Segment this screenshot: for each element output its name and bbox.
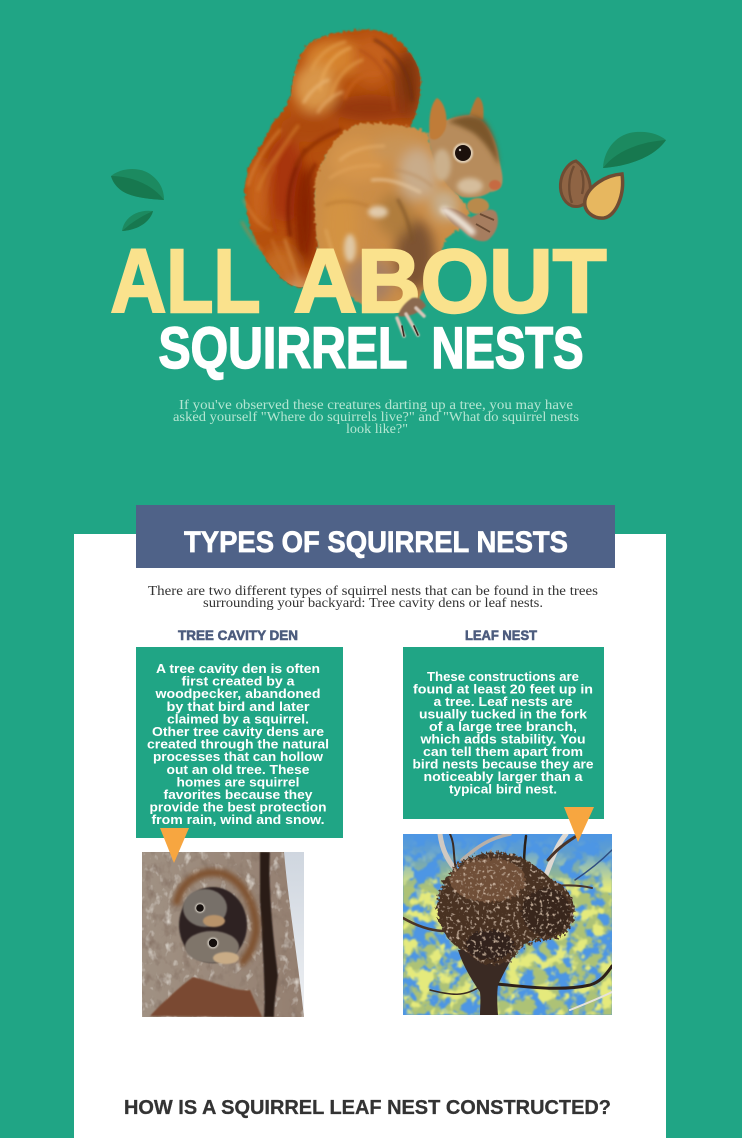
panel: leaf nest text box: These constructions are (427, 669, 579, 684)
section intro text: surrounding your backyard: Tree cavity dens or leaf nests. (203, 595, 543, 610)
panel: leaf nest text box: of a large tree branch, (429, 719, 577, 734)
panel: tree cavity den text box: homes are squirrel (176, 774, 300, 789)
squirrel eye (453, 143, 473, 163)
panel: tree cavity den text box (136, 647, 343, 838)
squirrel body (315, 123, 470, 310)
subheading: tree cavity den: TREE CAVITY DEN (178, 627, 298, 643)
panel: tree cavity den text box: A tree cavity den is often (156, 661, 320, 676)
illustration: squirrel (242, 30, 503, 310)
section intro text: There are two different types of squirrel nests that can be found in the trees (148, 583, 598, 598)
title line: ALL ABOUT: ALL (110, 232, 260, 332)
panel: leaf nest text box: bird nests because they are (412, 756, 594, 771)
panel: tree cavity den text box: out an old tree. These (166, 762, 310, 777)
icon: left large leaf (111, 169, 164, 200)
panel: tree cavity den text box: claimed by a squirrel. (167, 711, 309, 726)
icon: tan nut (585, 174, 623, 218)
squirrel hind foot (397, 298, 426, 336)
panel: leaf nest text box: typical bird nest. (449, 781, 557, 796)
icon: brown nut (560, 161, 590, 206)
title line: ALL ABOUT (110, 232, 607, 332)
squirrel far ear (469, 97, 483, 120)
panel: leaf nest text box: a tree. Leaf nests are (434, 694, 572, 709)
arrow: leaf nest pointer (564, 807, 594, 842)
panel: tree cavity den text box: Other tree cavity dens are (152, 724, 324, 739)
cavity squirrel upper (183, 889, 227, 927)
photo: squirrels in tree cavity (142, 852, 304, 1017)
intro text: look like?" (346, 421, 408, 436)
panel: white content (74, 534, 666, 1138)
panel: tree cavity den text box: by that bird and later (166, 699, 310, 714)
panel: leaf nest text box: found at least 20 feet up in (413, 682, 593, 696)
squirrel nose (489, 180, 501, 190)
icon: right leaf (603, 132, 666, 168)
panel: tree cavity den text box: created through the natural (147, 737, 329, 752)
section banner (136, 505, 615, 568)
panel: tree cavity den text box: processes that can hollow (153, 749, 324, 764)
cavity squirrel lower (185, 931, 239, 964)
panel: tree cavity den text box: provide the best protection (150, 800, 327, 815)
squirrel paws and nut (442, 198, 498, 241)
subheading: leaf nest: LEAF NEST (465, 627, 537, 643)
section intro text (148, 583, 598, 610)
panel: leaf nest text box (403, 647, 604, 819)
panel: leaf nest text box: usually tucked in the fork (419, 706, 588, 721)
section heading: TYPES OF SQUIRREL NESTS (184, 526, 568, 559)
intro text: asked yourself "Where do squirrels live?" and "What do squirrel nests (173, 409, 579, 424)
panel: leaf nest text box: which adds stability. You (419, 731, 586, 746)
page artwork (74, 28, 666, 1138)
nest (437, 852, 574, 965)
squirrel head (428, 115, 503, 197)
title line: SQUIRREL NESTS: SQUIRREL (158, 316, 408, 381)
squirrel near ear (429, 98, 447, 140)
intro text: If you've observed these creatures darting up a tree, you may have (179, 397, 573, 412)
squirrel tail (242, 30, 421, 293)
panel: leaf nest text box: noticeably larger than a (424, 769, 583, 784)
panel: tree cavity den text box: first created by a (182, 674, 295, 689)
bottom heading: HOW IS A SQUIRREL LEAF NEST CONSTRUCTED? (124, 1097, 611, 1119)
icon: left small leaf (122, 211, 153, 231)
panel: tree cavity den text box: from rain, wind and snow. (152, 812, 324, 827)
arrow: tree cavity den pointer (160, 828, 189, 863)
panel: leaf nest text box: can tell them apart from (423, 744, 583, 759)
title line: ALL ABOUT: ABOUT (294, 232, 607, 332)
title line: SQUIRREL NESTS: NESTS (432, 316, 584, 381)
intro text (173, 397, 579, 436)
infographic page (74, 28, 666, 1138)
photo: leaf nest in tree (403, 834, 612, 1015)
panel: tree cavity den text box: woodpecker, abandoned (154, 686, 321, 701)
panel: tree cavity den text box: favorites because they (164, 787, 313, 802)
